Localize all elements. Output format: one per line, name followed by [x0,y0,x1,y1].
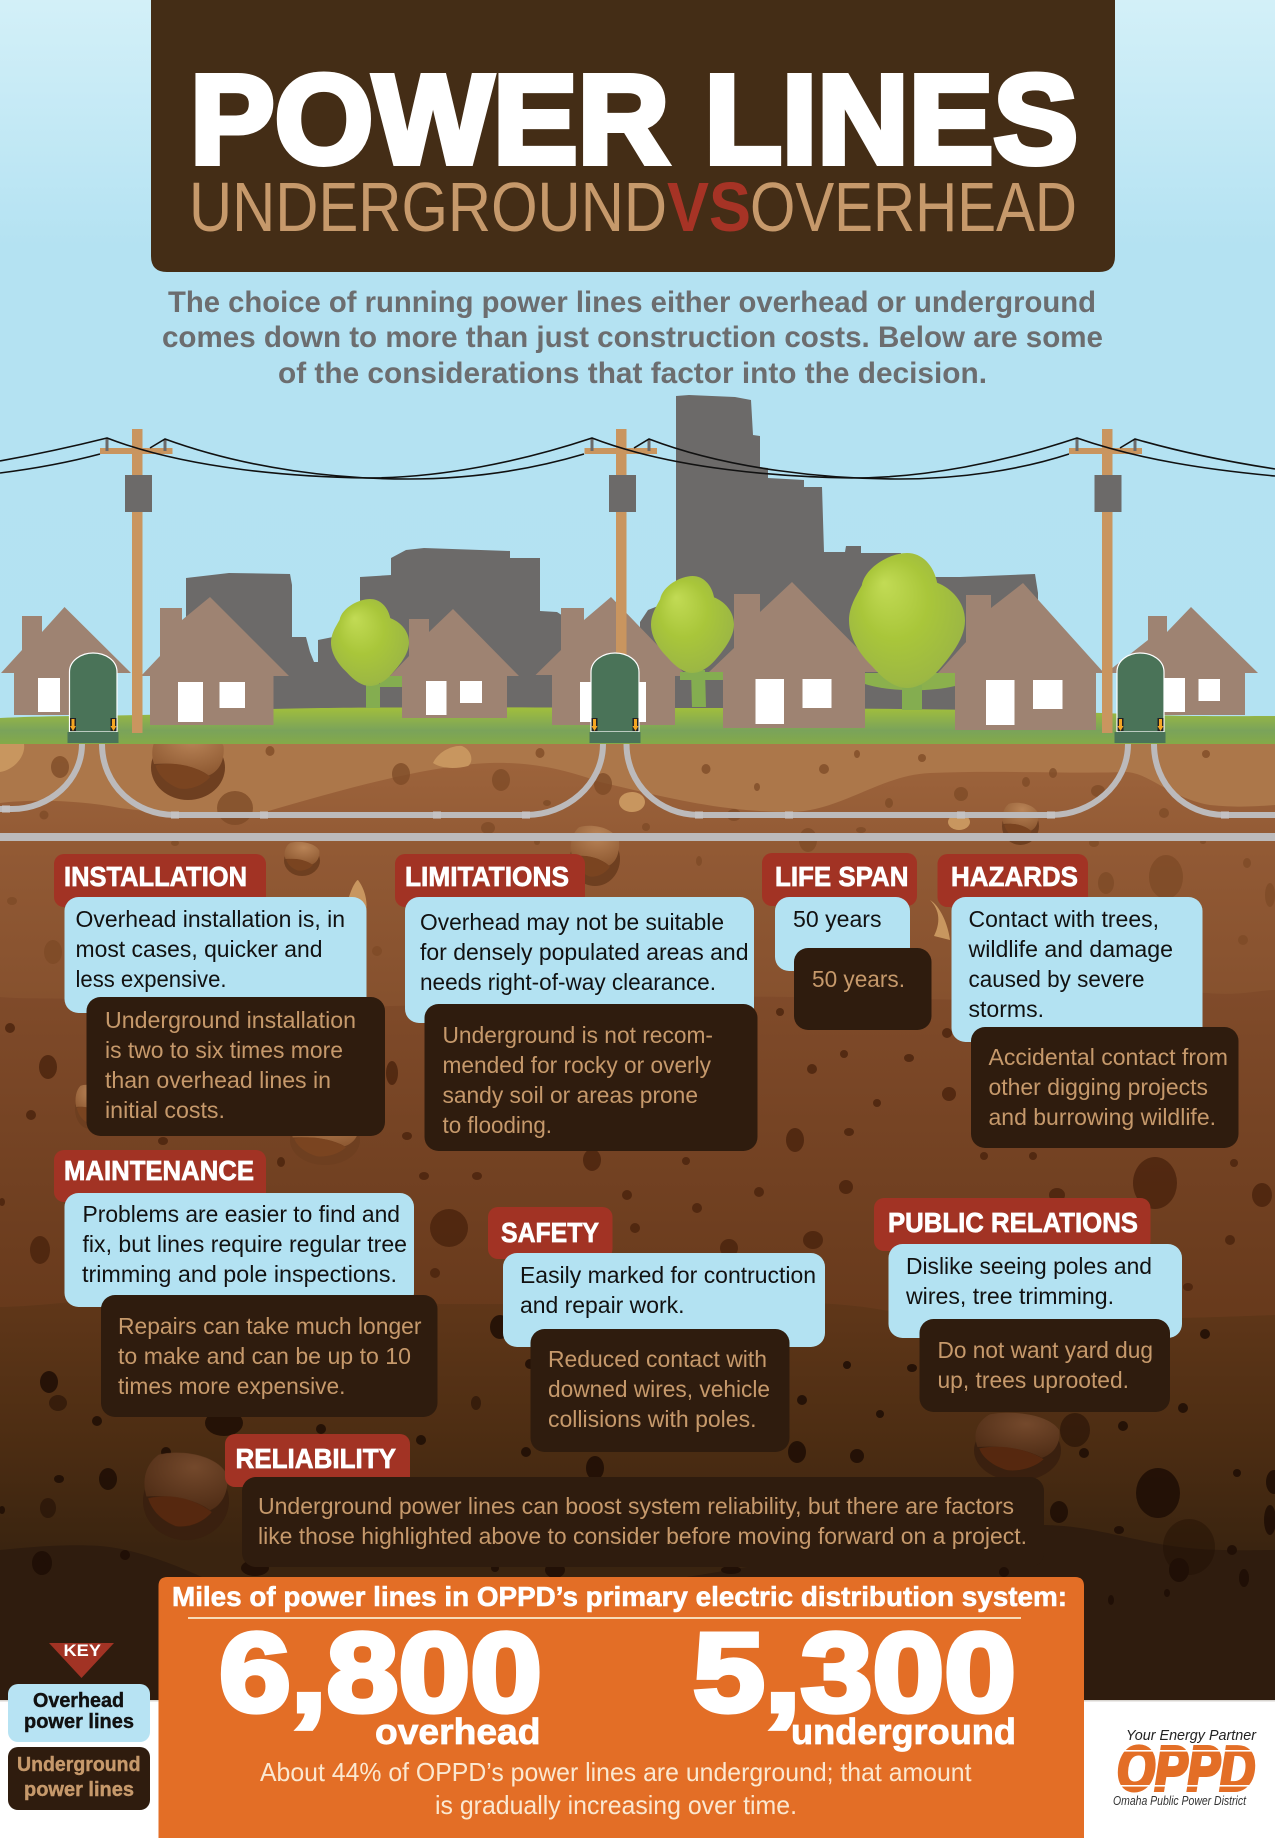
overhead note: hazards: wildlife and damage [968,936,1173,962]
key: overhead: power lines [24,1711,134,1733]
subtitle: underground vs overhead: OVERHEAD [750,168,1077,246]
underground note: life span [794,948,932,1030]
underground note: maintenance: to make and can be up to 10 [118,1343,411,1369]
soil rocks [0,728,1061,1540]
soil pebbles: upper [7,746,1275,964]
overhead note: safety: and repair work. [520,1292,684,1318]
overhead wires [0,438,1275,479]
tree: large [849,553,965,710]
underground note: maintenance: Repairs can take much longer [118,1313,422,1339]
ground: grass [0,707,1275,746]
stat: overhead miles: overhead [375,1711,540,1752]
underground note: safety: downed wires, vehicle [548,1376,770,1402]
main underground line [0,833,1275,841]
OPPD logo: Omaha Public Power District [1113,1793,1247,1808]
underground note: public relations: up, trees uprooted. [938,1367,1129,1393]
stat: underground miles: 5,300 [693,1610,1016,1735]
rock: behind installation [75,1084,87,1128]
overhead note: safety [503,1253,825,1347]
heading: limitations [395,854,585,907]
rock: large near surface [151,744,225,800]
stat: underground miles: underground [791,1711,1016,1752]
stat divider [188,1617,1021,1619]
panel: safety [488,1207,825,1452]
heading: public relations [874,1198,1150,1251]
heading: limitations: LIMITATIONS [405,861,569,892]
subtitle: underground vs overhead [189,168,1077,246]
underground note: limitations: to flooding. [442,1112,552,1138]
stat note [260,1757,972,1820]
soil layers [0,744,1275,1705]
underground note: public relations: Do not want yard dug [938,1337,1153,1363]
skyline: city buildings [186,395,1038,722]
house: right [938,583,1104,730]
underground note: installation [86,997,385,1136]
overhead note: limitations: needs right-of-way clearance. [420,969,716,995]
key: underground: Underground [17,1754,140,1776]
underground note: limitations: mended for rocky or overly [442,1052,711,1078]
rock: behind maintenance heading [292,1136,356,1146]
panel: installation [54,854,385,1136]
heading: hazards [938,854,1088,907]
cabinet 2 [590,653,640,743]
panel: miles of power lines [158,1577,1084,1838]
overhead note: hazards: storms. [968,996,1044,1022]
underground note: hazards: other digging projects [988,1074,1208,1100]
stat: overhead miles: 6,800 [219,1610,542,1735]
stones: tan [0,744,970,940]
heading: life span [762,853,917,906]
rock: near right pipe [1002,803,1039,845]
background: sky [0,0,1275,750]
key: overhead: Overhead [33,1690,124,1712]
subtitle: underground vs overhead: UNDERGROUND [189,168,667,246]
overhead note: limitations: for densely populated areas and [420,939,748,965]
utility poles and wires [0,429,1275,733]
overhead note: public relations: Dislike seeing poles and [906,1253,1152,1279]
rock: small under pipe [284,842,320,876]
cabinet 3 [1114,653,1166,743]
transformer cabinets [68,653,1166,743]
panel: hazards [938,854,1238,1148]
panel: life span [762,853,932,1030]
key [8,1641,150,1810]
underground note: hazards [971,1027,1238,1148]
heading: maintenance [54,1150,266,1202]
underground note: reliability: like those highlighted above to consider before moving forward on a project. [258,1523,1027,1549]
pole 3 [1069,429,1142,733]
rock: under limitations heading [570,826,620,886]
key: underground: power lines [24,1779,134,1801]
key marker: KEY [64,1641,102,1660]
underground pipes [0,744,1275,837]
overhead note: installation: Overhead installation is, in [76,906,345,932]
stat note: is gradually increasing over time. [435,1790,797,1820]
overhead note: limitations: Overhead may not be suitable [420,909,724,935]
rock: lower left large [143,1452,229,1526]
heading: hazards: HAZARDS [951,861,1078,892]
heading: installation [54,854,266,907]
stat heading: Miles of power lines in OPPD’s primary electric distribution system: [172,1581,1067,1612]
heading: life span: LIFE SPAN [775,861,908,892]
stat note: About 44% of OPPD’s power lines are underground; that amount [260,1757,972,1787]
pole 1 [100,429,172,733]
title panel [151,0,1115,272]
overhead note: public relations [888,1244,1182,1338]
underground note: reliability: Underground power lines can boost system reliability, but there are factors [258,1493,1014,1519]
panel: reliability [225,1434,1044,1567]
overhead note: installation: most cases, quicker and [76,936,322,962]
overhead note: installation: less expensive. [76,966,226,992]
underground note: safety [530,1329,790,1452]
overhead note: maintenance: fix, but lines require regular tree [82,1231,407,1257]
key: underground [8,1747,150,1810]
panel: limitations [395,854,758,1151]
underground note: installation: initial costs. [105,1097,225,1123]
subtitle: underground vs overhead: VS [667,168,751,246]
pipe: cabinet connections [0,744,1275,815]
overhead note: public relations: wires, tree trimming. [905,1283,1114,1309]
cabinet 1 [68,653,118,743]
overhead note: limitations [405,897,754,1023]
houses and trees [1,553,1258,730]
heading: safety: SAFETY [501,1217,599,1248]
underground note: limitations: Underground is not recom- [442,1022,713,1048]
overhead note: hazards: caused by severe [968,966,1144,992]
title: power lines: POWER LINES [190,49,1078,190]
overhead note: installation [64,897,366,1013]
key: overhead [8,1684,150,1742]
pole 2 [584,429,657,733]
underground note: hazards: and burrowing wildlife. [988,1104,1216,1130]
intro paragraph: The choice of running power lines either overhead or underground [168,286,1096,319]
overhead note: maintenance: Problems are easier to find and [82,1201,400,1227]
house: right of center [709,582,881,728]
OPPD logo: Your Energy Partner [1126,1727,1257,1744]
tree: middle [651,576,734,707]
underground note: installation: than overhead lines in [105,1067,331,1093]
overhead note: hazards [952,897,1202,1042]
intro paragraph: comes down to more than just construction costs. Below are some [162,321,1103,354]
heading: reliability: RELIABILITY [236,1443,396,1474]
pipe connectors [6,806,1225,818]
underground note: installation: Underground installation [105,1007,356,1033]
overhead note: maintenance: trimming and pole inspections. [82,1261,397,1287]
intro paragraph [162,286,1103,390]
heading: safety [488,1207,612,1259]
overhead note: safety: Easily marked for contruction [520,1262,816,1288]
underground note: maintenance: times more expensive. [118,1373,346,1399]
tree: small left [331,599,410,708]
house: center [536,597,687,725]
overhead note: life span [775,897,910,971]
heading: installation: INSTALLATION [64,861,247,892]
house: center left [390,609,519,718]
heading: public relations: PUBLIC RELATIONS [888,1207,1138,1238]
panel: public relations [874,1198,1182,1412]
underground note: installation: is two to six times more [105,1037,343,1063]
underground note: public relations [920,1319,1170,1412]
panel: maintenance [54,1150,438,1417]
underground note: life span: 50 years. [812,966,905,992]
bottom white strips [0,1700,1275,1838]
overhead note: hazards: Contact with trees, [968,906,1159,932]
heading: reliability [225,1434,410,1487]
rock: lower right large [974,1413,1061,1481]
soil pebbles: middle [0,1008,1272,1291]
underground note: limitations [424,1004,758,1151]
house: far left [1,607,131,715]
heading: maintenance: MAINTENANCE [64,1155,254,1186]
underground note: safety: Reduced contact with [548,1346,767,1372]
key marker [49,1641,114,1678]
intro paragraph: of the considerations that factor into the decision. [278,357,987,390]
overhead note: life span: 50 years [793,906,882,932]
house: far right [1106,607,1258,715]
house: left [141,597,289,725]
underground note: hazards: Accidental contact from [988,1044,1228,1070]
soil pebbles: lower [0,1315,1275,1605]
underground note: safety: collisions with poles. [548,1406,756,1432]
OPPD logo [1113,1727,1259,1808]
underground note: maintenance [101,1295,438,1417]
underground note: limitations: sandy soil or areas prone [442,1082,698,1108]
underground note: reliability [242,1477,1044,1567]
overhead note: maintenance [64,1193,414,1307]
